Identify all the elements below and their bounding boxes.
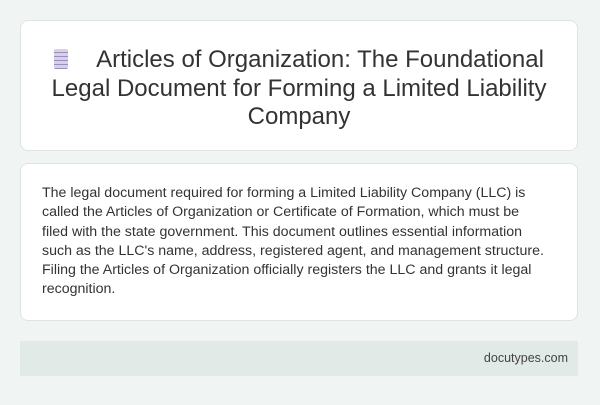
panel: title card	[20, 20, 578, 151]
text block: Filing the Articles of Organization officially registers the LLC and grants it legal	[42, 262, 531, 278]
text block	[42, 185, 544, 297]
panel: description	[20, 163, 578, 321]
title: Articles of Organization: The Foundational Legal Document for Forming a Limited Liability Company	[52, 46, 546, 130]
icon: document	[54, 49, 68, 69]
text block: called the Articles of Organization or Certificate of Formation, which must be	[42, 204, 519, 220]
text block: The legal document required for forming a Limited Liability Company (LLC) is	[42, 185, 525, 201]
text block: recognition.	[42, 281, 115, 297]
footer bar	[20, 341, 578, 376]
footer text: docutypes.com	[484, 351, 568, 365]
text block: filed with the state government. This document outlines essential information	[42, 224, 522, 240]
text block: such as the LLC's name, address, registered agent, and management structure.	[42, 243, 544, 259]
